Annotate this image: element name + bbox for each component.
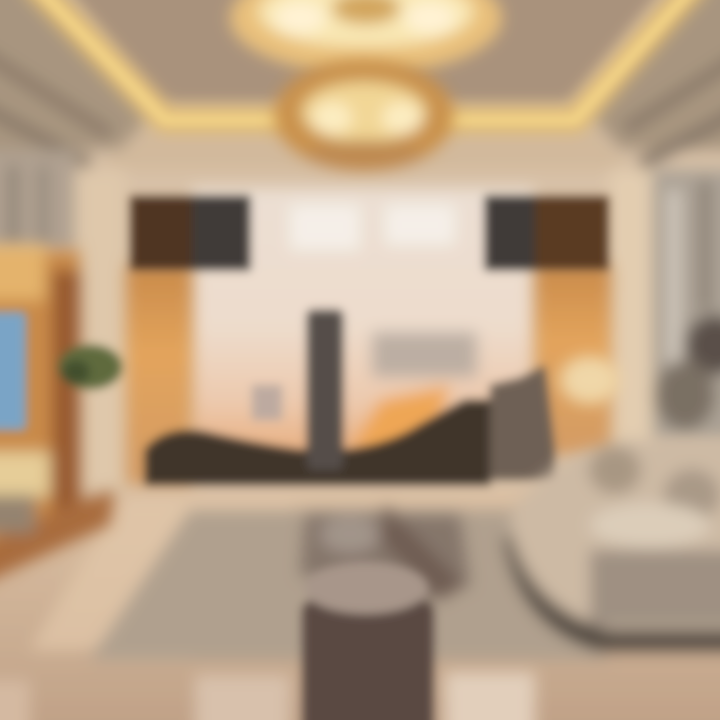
floor <box>0 490 720 720</box>
floor tile highlights <box>0 672 535 720</box>
television screen <box>0 312 26 430</box>
right sofa <box>505 440 720 650</box>
chandelier <box>230 0 502 171</box>
plant <box>58 345 122 389</box>
ottoman <box>302 562 434 720</box>
dark speaker right <box>485 196 609 270</box>
orange wall panel right <box>535 265 611 455</box>
gold ceiling trim <box>35 0 695 120</box>
television unit <box>0 245 115 590</box>
left ceiling and wall stripes <box>0 0 150 490</box>
dark speaker left <box>130 196 250 270</box>
central tower <box>307 310 343 470</box>
area rug <box>90 510 610 660</box>
upper chandelier ring <box>230 0 502 74</box>
coffee table <box>300 505 470 600</box>
ceiling <box>50 0 680 170</box>
city skyline silhouette <box>145 310 555 485</box>
lamp glow right <box>560 356 620 404</box>
right ceiling and wall stripes <box>590 0 720 450</box>
orange wall panel left <box>126 265 192 485</box>
window view <box>192 188 534 463</box>
lower chandelier ring <box>274 59 454 171</box>
low skyline <box>145 400 490 485</box>
